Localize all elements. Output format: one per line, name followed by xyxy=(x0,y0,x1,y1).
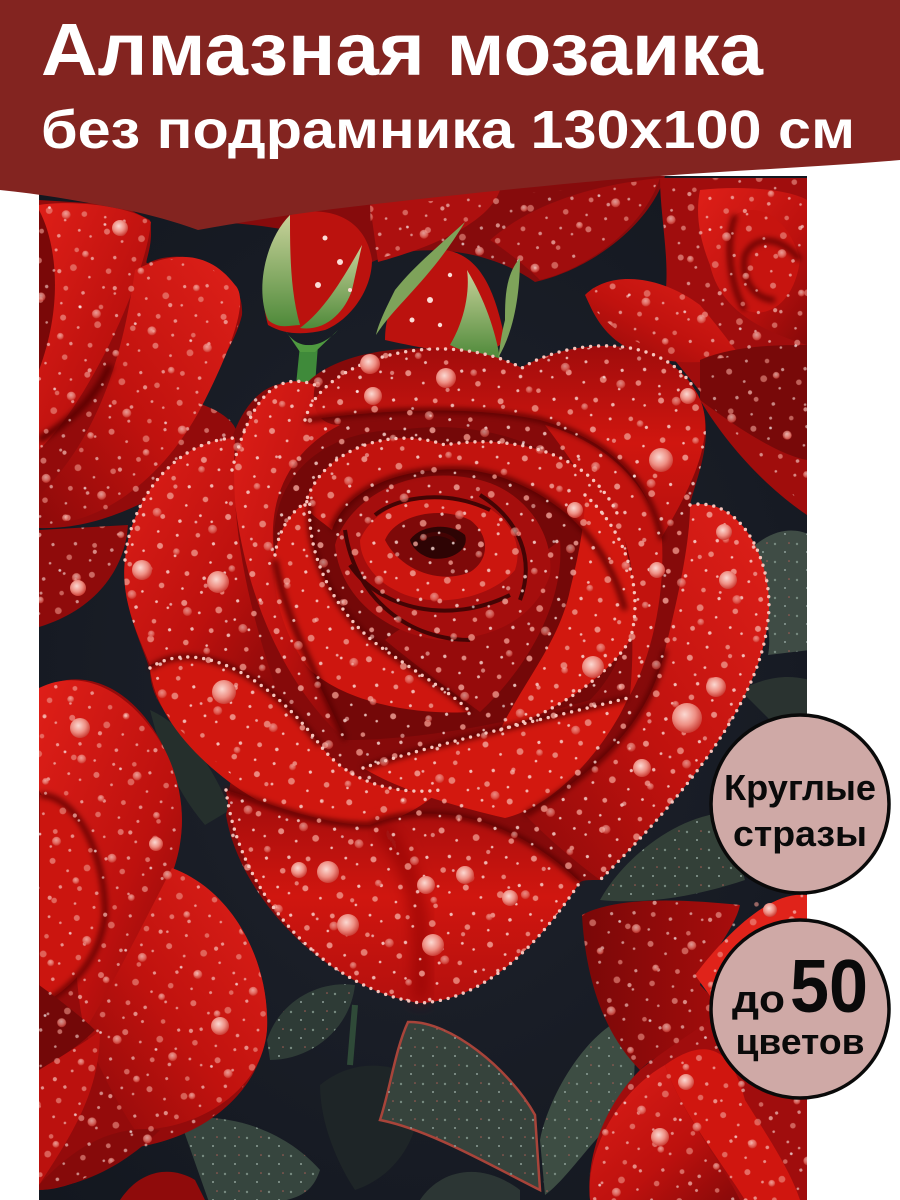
side rose dew xyxy=(39,176,807,1200)
rose: top right xyxy=(585,178,807,515)
leaf dew texture xyxy=(180,531,810,1200)
rose bud right xyxy=(376,222,520,358)
petal: lower right fold xyxy=(363,698,628,818)
petal: left upper xyxy=(232,381,345,740)
centre swirl xyxy=(335,476,550,640)
badge: up to 50 colours: 50 xyxy=(790,944,868,1028)
petal: right outer xyxy=(525,504,769,880)
rose: lower right xyxy=(582,895,807,1200)
petal: far left xyxy=(124,438,273,684)
petal: right inner xyxy=(545,425,662,695)
inner dark centre xyxy=(274,427,633,740)
badge: round rhinestones xyxy=(711,715,889,893)
dew on main rose xyxy=(120,335,775,1005)
petal: top xyxy=(305,346,705,540)
petal: inner left xyxy=(274,500,470,713)
title: Алмазная мозаика xyxy=(41,8,764,91)
rose bud left xyxy=(262,211,372,385)
large drops xyxy=(70,220,777,1146)
badge: round rhinestones: Круглые xyxy=(724,767,876,808)
base shadow xyxy=(124,348,769,1003)
badge: up to 50 colours: цветов xyxy=(736,1021,864,1062)
banner: top dark red ribbon xyxy=(0,0,900,230)
centre swirl lines xyxy=(345,495,526,640)
petal edge shadows xyxy=(150,411,665,882)
leaves xyxy=(150,531,810,1200)
petal: inner top wrap xyxy=(306,438,630,566)
artwork: red roses with water drops xyxy=(39,176,810,1200)
top back petals xyxy=(215,176,665,282)
badge: up to 50 colours: до xyxy=(732,979,785,1021)
badge: up to 50 colours xyxy=(711,920,889,1098)
rose: lower left xyxy=(39,679,267,1190)
petal: lower left fold xyxy=(150,657,440,828)
subtitle: без подрамника 130х100 см xyxy=(41,100,855,160)
badge: round rhinestones: стразы xyxy=(733,813,867,854)
petal: centre lower xyxy=(385,540,560,712)
rose: top left xyxy=(39,200,242,627)
petal: inner right band xyxy=(500,495,635,730)
main rose xyxy=(70,220,777,1146)
dew beading along petal edges xyxy=(125,346,769,1003)
petal: bottom xyxy=(226,790,580,1003)
red bottom fragment xyxy=(120,1172,205,1200)
